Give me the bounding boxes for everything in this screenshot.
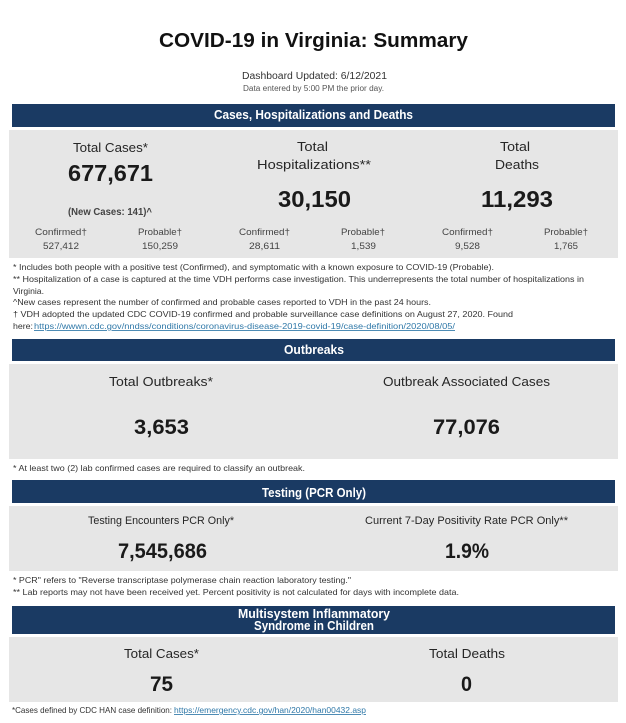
footnote: outbreaks: * At least two (2) lab confirmed cases are required to classify an outbreak. — [13, 463, 305, 473]
footnotes: cases: Virginia. — [13, 286, 44, 296]
section heading: Testing (PCR Only) — [262, 486, 366, 500]
data entry note: Data entered by 5:00 PM the prior day. — [243, 84, 384, 93]
section heading: Multisystem Inflammatory — [238, 607, 390, 621]
metric: total deaths: 0 — [461, 672, 472, 696]
footnote: case definition: *Cases defined by CDC HAN case definition: — [12, 705, 172, 715]
metric: total hospitalizations: 28,611 — [249, 241, 280, 252]
metric: testing encounters: Testing Encounters PCR Only* — [88, 515, 235, 527]
metric: total hospitalizations: Probable† — [341, 227, 385, 238]
metric: total deaths: 11,293 — [481, 186, 553, 212]
footnotes: cases: ^New cases represent the number of confirmed and probable cases reported to VDH in the past 24 hours. — [13, 297, 431, 307]
section header bar — [12, 480, 615, 503]
footnotes: cases: here: — [13, 321, 33, 331]
footnotes: testing — [13, 575, 459, 597]
metric: total deaths: Deaths — [495, 157, 540, 172]
metric: total outbreaks: 3,653 — [134, 415, 189, 439]
metric: total hospitalizations — [239, 139, 385, 252]
panel: multisystem inflammatory syndrome: Syndrome in Children — [254, 619, 374, 633]
metric: total cases: Total Cases* — [124, 646, 199, 661]
metric: total outbreaks — [109, 374, 213, 439]
metric: total deaths — [442, 139, 588, 252]
footnotes: cases: † VDH adopted the updated CDC COVID-19 confirmed and probable surveillance case definitions on August 27, 2020. Found — [13, 309, 513, 319]
metric: total cases: 75 — [150, 672, 173, 696]
panel background — [9, 364, 618, 459]
metric: total deaths: Confirmed† — [442, 227, 493, 238]
metric: positivity rate — [365, 515, 569, 563]
metric: total deaths: Total — [500, 139, 530, 154]
metric: outbreak associated cases: 77,076 — [433, 415, 500, 439]
metric: total deaths: Total Deaths — [429, 646, 506, 661]
metric: total hospitalizations: 30,150 — [278, 186, 351, 212]
dashboard updated date: Dashboard Updated: 6/12/2021 — [242, 71, 387, 82]
metric: total hospitalizations: Confirmed† — [239, 227, 290, 238]
panel: outbreaks — [9, 339, 618, 459]
metric: total hospitalizations: Total — [297, 139, 328, 154]
metric: total hospitalizations: 1,539 — [351, 241, 376, 252]
metric: total deaths: Probable† — [544, 227, 588, 238]
metric: total cases: 527,412 — [43, 241, 79, 252]
metric: total deaths: 9,528 — [455, 241, 480, 252]
footnote: case definition — [12, 705, 366, 715]
metric: total cases: Probable† — [138, 227, 182, 238]
panel: multisystem inflammatory syndrome — [9, 606, 618, 702]
panel background — [9, 637, 618, 702]
metric: testing encounters: 7,545,686 — [118, 539, 207, 563]
panel: cases, hospitalizations and deaths — [9, 104, 618, 258]
metric: total deaths: 1,765 — [554, 241, 578, 252]
metric: positivity rate: Current 7-Day Positivity Rate PCR Only** — [365, 515, 569, 527]
footnotes: cases — [13, 262, 584, 331]
footnotes: testing: ** Lab reports may not have been received yet. Percent positivity is not calculated for days with incomplete data. — [13, 587, 459, 597]
metric: total cases — [124, 646, 199, 696]
section heading: Outbreaks — [284, 343, 344, 357]
section heading: Cases, Hospitalizations and Deaths — [214, 108, 413, 122]
metric: total cases: 677,671 — [68, 160, 153, 186]
footnote: case definition: https://emergency.cdc.gov/han/2020/han00432.asp — [174, 705, 366, 715]
footnotes: cases: ** Hospitalization of a case is captured at the time VDH performs case investigation. This underrepresents the total number of hospitalizations in — [13, 274, 584, 284]
metric: total cases — [35, 140, 182, 252]
metric: total cases: Confirmed† — [35, 227, 87, 238]
footnotes: cases: * Includes both people with a positive test (Confirmed), and symptomatic with a known exposure to COVID-19 (Probable). — [13, 262, 494, 272]
metric: outbreak associated cases — [383, 374, 551, 439]
metric: total outbreaks: Total Outbreaks* — [109, 374, 213, 389]
footnotes: cases: https://wwwn.cdc.gov/nndss/conditions/coronavirus-disease-2019-covid-19/case-definition/2020/08/05/ — [34, 321, 456, 331]
metric: positivity rate: 1.9% — [445, 539, 489, 563]
section header bar — [12, 606, 615, 634]
metric: total deaths — [429, 646, 506, 696]
metric: total cases: Total Cases* — [73, 140, 148, 155]
panel background — [9, 506, 618, 571]
metric: total hospitalizations: Hospitalizations** — [257, 157, 371, 172]
footnotes: testing: * PCR" refers to "Reverse transcriptase polymerase chain reaction laboratory testing." — [13, 575, 351, 585]
metric: total cases: 150,259 — [142, 241, 178, 252]
panel background — [9, 130, 618, 258]
metric: total cases: (New Cases: 141)^ — [68, 206, 152, 218]
metric: testing encounters — [88, 515, 235, 563]
section header bar — [12, 339, 615, 361]
metric: outbreak associated cases: Outbreak Associated Cases — [383, 374, 551, 389]
section header bar — [12, 104, 615, 127]
title: COVID-19 in Virginia: Summary — [159, 29, 469, 52]
panel: testing — [9, 480, 618, 571]
